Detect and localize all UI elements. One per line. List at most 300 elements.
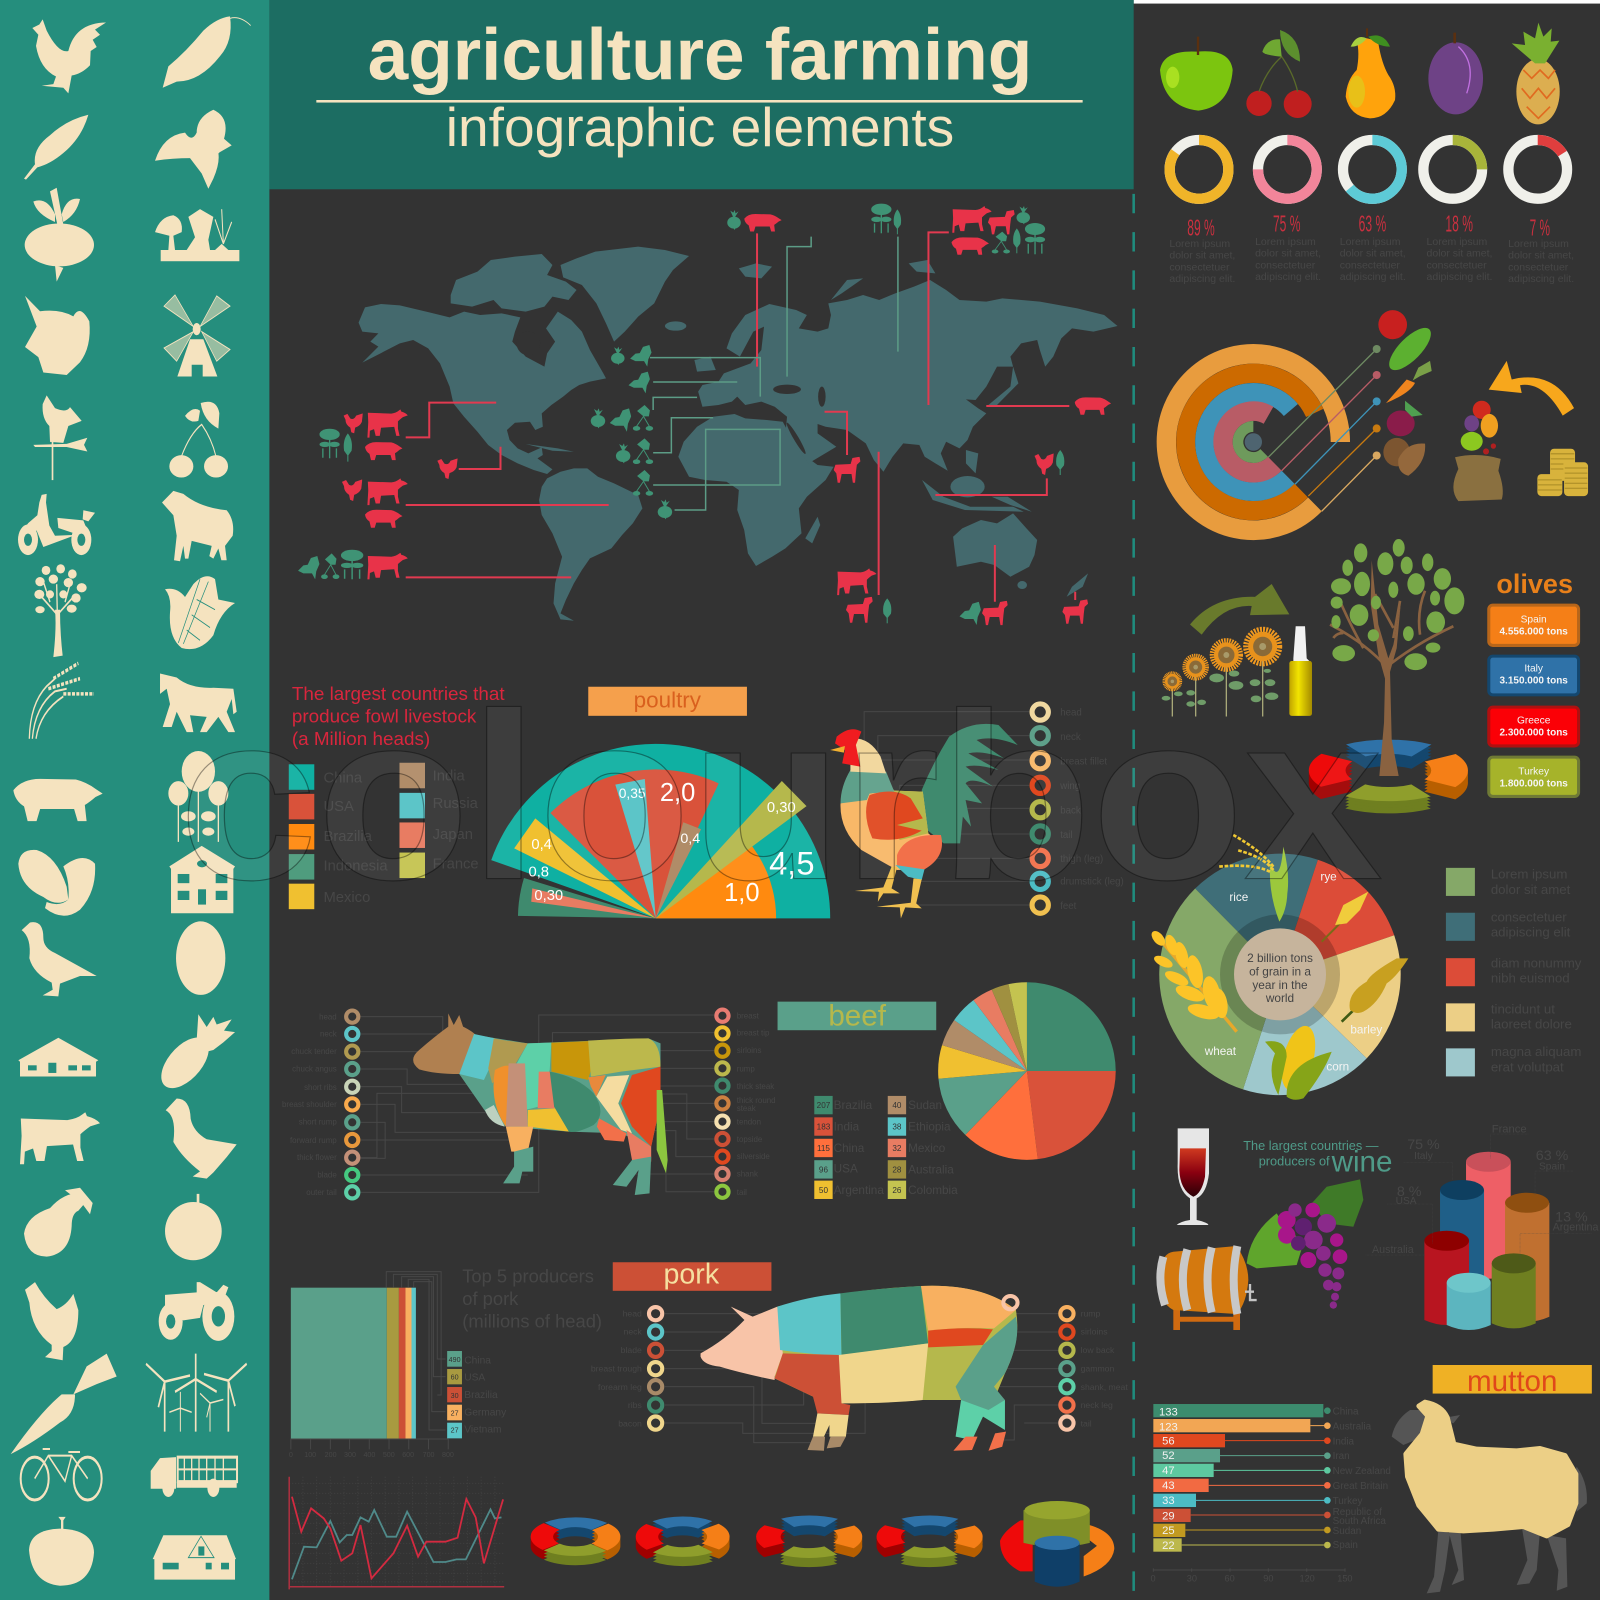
rooster part labels: wing	[1059, 781, 1080, 792]
cow right rings	[716, 1010, 729, 1198]
pork label	[613, 1259, 771, 1291]
beef legend: Brazilia	[834, 1099, 873, 1112]
cow chest	[494, 1066, 511, 1127]
map: continents	[359, 247, 1118, 621]
beef legend: USA	[834, 1162, 858, 1175]
mutton axis labels: 60	[1224, 1574, 1235, 1584]
cow right labels: breast	[737, 1011, 760, 1020]
panel: icon sidebar	[0, 0, 269, 1600]
fruit captions: adipiscing elit.	[1255, 271, 1321, 283]
grain legend: tincidunt ut	[1491, 1001, 1555, 1016]
cow forelegs	[506, 1127, 533, 1152]
olives: Spain	[1489, 605, 1579, 645]
mutton label	[1433, 1365, 1592, 1398]
cow tail	[657, 1090, 668, 1173]
rooster part labels: thigh (leg)	[1060, 854, 1103, 865]
icon: truck	[151, 1457, 237, 1497]
icon: turnip	[25, 188, 94, 282]
olives: Turkey: Turkey	[1518, 766, 1550, 777]
icon: olive tree	[34, 564, 87, 657]
3d ring chart 3	[753, 1514, 865, 1568]
rooster beak	[830, 746, 845, 753]
poultry heading text	[292, 683, 505, 749]
pork stacked bar chart	[291, 1272, 462, 1449]
poultry legend: Mexico	[323, 890, 370, 906]
vegetable chart and market	[1162, 310, 1588, 716]
grain legend: consectetuer	[1491, 909, 1567, 924]
barrel	[1158, 1246, 1257, 1314]
pig hind hooves	[953, 1432, 1006, 1451]
title banner	[269, 0, 1134, 189]
beef legend: 96	[819, 1165, 828, 1174]
mutton country labels	[1333, 1406, 1391, 1551]
pork chart axis labels and legend text: 200	[325, 1451, 337, 1459]
bars	[1153, 1404, 1323, 1552]
rooster part labels: breast fillet	[1060, 756, 1107, 767]
icon: wheat ear	[24, 115, 88, 180]
beef legend: 183	[817, 1123, 831, 1132]
rooster comb	[835, 729, 861, 767]
pig shoulder	[775, 1353, 850, 1415]
mutton country labels: China	[1333, 1406, 1359, 1417]
icon: garden	[155, 209, 239, 261]
rooster part labels	[1059, 707, 1124, 912]
poultry fan chart: 1,0	[724, 879, 760, 907]
cow leader lines	[360, 1015, 714, 1192]
mutton axis labels: 120	[1299, 1574, 1315, 1584]
bar dots	[1324, 1407, 1331, 1548]
coins	[1537, 449, 1588, 496]
fruit percentages: 75 %	[1273, 211, 1301, 237]
mutton bar chart	[1153, 1402, 1587, 1593]
poultry legend: Japan	[433, 827, 473, 843]
mutton country labels: India	[1333, 1436, 1355, 1447]
pig right labels: sirloins	[1081, 1327, 1108, 1337]
cow right labels: rump	[737, 1064, 755, 1073]
wine country labels: USA	[1396, 1196, 1417, 1207]
grain legend	[1446, 867, 1582, 1076]
olives: Turkey: 1.800.000 tons	[1499, 779, 1568, 790]
cow left labels: forward rump	[290, 1136, 337, 1145]
pork chart axis labels and legend text: 500	[383, 1451, 395, 1459]
icon: tractor	[159, 1282, 234, 1341]
mutton country labels: Great Britain	[1333, 1481, 1388, 1492]
title: agriculture farming	[368, 15, 1032, 96]
3d ring chart 2	[632, 1515, 733, 1568]
rooster part labels: neck	[1060, 732, 1081, 743]
cow left labels: thick flower	[297, 1153, 337, 1162]
cow diagram	[360, 1013, 714, 1195]
poultry legend: Russia	[433, 796, 479, 812]
pig ham	[921, 1286, 1016, 1331]
cow belly	[538, 1072, 555, 1108]
pork chart axis labels and legend text: USA	[464, 1373, 485, 1384]
fruit percentages	[1187, 211, 1550, 241]
olives: Italy	[1489, 656, 1579, 695]
fruit percentage rings	[1170, 140, 1567, 199]
beef legend: 207	[817, 1101, 831, 1110]
cow left rings	[346, 1011, 358, 1198]
pig left labels: forearm leg	[598, 1382, 642, 1392]
wine country labels	[1372, 1124, 1598, 1256]
wine country labels: Argentina	[1553, 1222, 1598, 1234]
beef legend: China	[834, 1142, 865, 1155]
beef legend: Ethiopia	[908, 1121, 951, 1134]
pork chart title: Top 5 producers	[462, 1266, 594, 1287]
rooster part labels: feet	[1060, 901, 1077, 912]
grain labels	[1204, 871, 1382, 1073]
icon: pineapple	[156, 1014, 235, 1099]
icon: rooster	[32, 19, 106, 93]
pork chart axis labels and legend text: 800	[442, 1451, 454, 1459]
poultry fan chart: 0,35	[619, 786, 646, 801]
mutton bar values: 133	[1159, 1406, 1178, 1418]
cow right labels: breast tip	[737, 1029, 770, 1038]
fruit captions: dolor sit amet,	[1169, 250, 1235, 262]
olives: Italy: Italy	[1524, 663, 1544, 674]
pig sirloin	[928, 1328, 993, 1347]
pig right labels	[1081, 1308, 1128, 1429]
pig gammon	[956, 1317, 1017, 1413]
olives: Greece: Greece	[1517, 715, 1551, 726]
grain labels: rice	[1229, 891, 1248, 904]
beef label	[778, 1000, 936, 1033]
poultry legend: France	[433, 856, 479, 872]
icon: weather vane	[33, 395, 87, 480]
pork chart axis labels and legend text: 600	[402, 1451, 414, 1459]
poultry legend: USA	[323, 799, 354, 815]
rooster legs	[855, 867, 922, 918]
pig leader lines	[665, 1314, 1059, 1443]
rooster breast	[840, 791, 941, 870]
rooster diagram	[830, 712, 1029, 918]
mutton country labels: Turkey	[1333, 1496, 1363, 1507]
cow head	[413, 1013, 476, 1074]
cow rib	[551, 1041, 599, 1080]
cow right labels: shank	[737, 1170, 758, 1179]
pig right labels: gammon	[1081, 1363, 1114, 1373]
pig hind leg	[956, 1400, 1005, 1440]
icon: cucumber	[163, 16, 251, 88]
pork chart axis labels and legend text: 60	[451, 1374, 459, 1382]
pointer lines	[1268, 349, 1377, 511]
dashed divider	[1132, 194, 1135, 1600]
olives: Spain: 4.556.000 tons	[1499, 627, 1568, 638]
arrow: orange	[1489, 361, 1574, 416]
icon: rice stalk	[29, 663, 94, 739]
barrel legs	[1173, 1310, 1240, 1330]
poultry legend: Brazilia	[323, 829, 373, 845]
mutton bar values: 47	[1162, 1465, 1175, 1477]
map: red leader lines	[406, 232, 1075, 602]
icon: windmill	[164, 295, 230, 377]
fruit captions: dolor sit amet,	[1340, 248, 1406, 260]
pork chart axis labels and legend text: 30	[451, 1392, 459, 1400]
poultry fan chart: 0,30	[534, 888, 563, 904]
sack with fruit	[1453, 401, 1503, 501]
icon: cow	[20, 1112, 100, 1164]
beef legend: 38	[892, 1123, 902, 1132]
poultry fan chart: 0,8	[528, 865, 549, 881]
rooster part rings	[1032, 704, 1048, 913]
icon: tomato	[165, 1194, 222, 1260]
rooster part labels: tail	[1060, 830, 1073, 841]
pork chart axis labels and legend text: China	[464, 1355, 491, 1366]
grain: barley icon	[1342, 958, 1408, 1022]
beef legend: Australia	[908, 1163, 954, 1176]
cylinder chart	[1424, 1152, 1549, 1330]
mutton bar values: 25	[1162, 1525, 1175, 1537]
fruit captions: Lorem ipsum	[1427, 236, 1487, 248]
pig fore hooves	[808, 1437, 846, 1451]
wine country labels: 63 %	[1536, 1148, 1569, 1164]
beef legend: Mexico	[908, 1142, 946, 1155]
rooster part labels: head	[1060, 707, 1082, 718]
grain centre	[1234, 928, 1326, 1020]
beef legend: 40	[892, 1101, 902, 1110]
grain legend: diam nonummy	[1491, 955, 1582, 970]
grain centre text: world	[1265, 991, 1294, 1005]
cow left labels: chuck tender	[291, 1047, 337, 1056]
mutton label: mutton	[1467, 1365, 1557, 1398]
pork chart axis labels and legend text: Germany	[464, 1407, 507, 1418]
icon: wind turbines	[146, 1354, 247, 1432]
poultry heading text: (a Million heads)	[292, 728, 430, 749]
icon: plum	[176, 921, 225, 995]
sheep legs and head	[1392, 1410, 1587, 1593]
wine country labels: Italy	[1414, 1151, 1434, 1162]
wine country labels: Australia	[1372, 1244, 1414, 1256]
poultry heading text: The largest countries that	[292, 683, 505, 704]
pork chart axis labels and legend text: Brazilia	[464, 1390, 498, 1401]
teal series	[292, 1509, 501, 1579]
grain: corn icon	[1265, 1022, 1332, 1100]
cow neck	[459, 1034, 495, 1080]
poultry fan chart: 4,5	[769, 844, 815, 881]
ring: 18 percent	[1423, 140, 1482, 199]
mutton country labels: South Africa	[1333, 1516, 1386, 1527]
bar leader lines	[386, 1272, 446, 1430]
tree trunk	[1371, 560, 1401, 776]
bar axis	[1153, 1568, 1345, 1572]
fruit: apple	[1160, 37, 1233, 111]
ring: 7 percent	[1508, 140, 1567, 199]
poultry heading text: produce fowl livestock	[292, 705, 477, 726]
bar connectors	[1182, 1426, 1327, 1545]
world map	[298, 204, 1118, 625]
wine heading: producers of	[1259, 1153, 1330, 1168]
pork chart axis labels and legend text: 300	[344, 1451, 356, 1459]
sheep fleece	[1406, 1402, 1576, 1536]
cow left labels	[282, 1012, 337, 1197]
leader lines	[861, 712, 1029, 905]
fruit captions: consectetuer	[1427, 259, 1487, 271]
icon: cottage	[153, 1535, 236, 1580]
pig left labels: ribs	[628, 1400, 643, 1410]
cow left labels: chuck angus	[292, 1064, 337, 1073]
sunflower leaves	[1162, 669, 1278, 707]
pig right rings	[1060, 1307, 1074, 1430]
mutton axis labels	[1151, 1574, 1353, 1584]
bar axis	[291, 1439, 448, 1449]
fruit captions: Lorem ipsum	[1169, 238, 1230, 250]
rooster part labels: drumstick (leg)	[1060, 877, 1124, 888]
tree leaves	[1331, 539, 1464, 670]
white strip top right	[1134, 0, 1600, 4]
mutton bar values: 33	[1162, 1495, 1175, 1507]
cow udder	[597, 1118, 627, 1142]
fruit percentages: 7 %	[1530, 215, 1550, 241]
fruit row	[1160, 23, 1560, 124]
olives: Italy: 3.150.000 tons	[1499, 676, 1568, 687]
bar legend	[447, 1351, 462, 1438]
icon: sunflowers	[168, 751, 228, 842]
icon: bicycle	[21, 1449, 102, 1500]
wine country labels: 75 %	[1407, 1137, 1440, 1153]
cow left labels: neck	[320, 1030, 337, 1039]
grain centre text	[1247, 951, 1313, 1005]
cow left labels: short ribs	[304, 1083, 337, 1092]
cow right labels: tail	[737, 1188, 747, 1197]
beef legend: 115	[817, 1144, 830, 1153]
grain: wheat icon	[1149, 928, 1237, 1032]
cow right labels: tendon	[737, 1117, 761, 1126]
pork chart title: of pork	[462, 1288, 519, 1309]
rooster drumstick	[895, 865, 924, 880]
grain legend: magna aliquam	[1491, 1044, 1581, 1059]
pig neck	[777, 1293, 842, 1355]
cow left labels: outer tail	[306, 1188, 337, 1197]
rooster wing	[866, 792, 923, 840]
icon: carrot	[11, 1354, 117, 1454]
wine country labels: 8 %	[1397, 1184, 1422, 1200]
olives: Spain: Spain	[1521, 614, 1547, 625]
grain legend: nibh euismod	[1491, 971, 1570, 986]
grain labels: corn	[1326, 1060, 1349, 1073]
beef label: beef	[828, 1000, 887, 1033]
fruit captions: adipiscing elit.	[1508, 273, 1574, 285]
pork chart title	[462, 1266, 602, 1332]
olives: Greece: 2.300.000 tons	[1499, 728, 1568, 739]
sunflower blossoms	[1164, 629, 1280, 690]
rooster neck	[841, 770, 894, 803]
cow right labels: topside	[737, 1135, 763, 1144]
mutton bar values	[1159, 1406, 1178, 1552]
fruit captions: adipiscing elit.	[1427, 271, 1492, 283]
cow body base	[459, 1035, 661, 1147]
beef legend: 50	[819, 1186, 828, 1195]
arrow: olive	[1190, 584, 1289, 635]
map: green crop icons	[298, 204, 1064, 625]
pork chart axis labels and legend text: 700	[423, 1451, 435, 1459]
vegetable: carrot	[1386, 361, 1432, 403]
mutton axis labels: 90	[1263, 1574, 1273, 1584]
cow left labels: blade	[317, 1171, 337, 1180]
pork chart title: (millions of head)	[462, 1311, 602, 1332]
pig left labels: neck	[624, 1327, 642, 1337]
subtitle: infographic elements	[446, 96, 954, 158]
cow right labels: sirloins	[737, 1046, 761, 1055]
oil bottle	[1289, 626, 1312, 716]
map: green leader lines	[650, 237, 898, 510]
pork chart axis labels and legend text	[289, 1355, 507, 1459]
rooster back	[878, 777, 928, 840]
icon: goose	[22, 922, 97, 996]
pig belly	[839, 1343, 928, 1403]
grain legend: erat volutpat	[1491, 1059, 1564, 1074]
pig diagram	[665, 1286, 1059, 1451]
grain centre text: year in the	[1252, 978, 1308, 992]
wine country labels: 13 %	[1555, 1209, 1588, 1225]
mutton country labels: Republic of	[1333, 1507, 1382, 1518]
wine heading: The largest countries —	[1243, 1138, 1379, 1153]
grain centre text: of grain in a	[1249, 965, 1311, 979]
grain segments	[1159, 854, 1401, 1095]
3d ring chart 5 with pillars	[1000, 1501, 1114, 1587]
bar segments	[291, 1288, 416, 1439]
icon: horse	[160, 673, 237, 732]
cow right labels	[737, 1011, 776, 1197]
cow sirloin tip	[588, 1075, 606, 1097]
cow right labels: thick round	[737, 1096, 776, 1105]
olive tree branches	[1330, 591, 1453, 667]
beef legend: Argentina	[834, 1184, 884, 1197]
mutton country labels: Australia	[1333, 1422, 1372, 1433]
pig left labels: bacon	[618, 1419, 642, 1429]
rooster head	[850, 738, 886, 773]
fruit: plum	[1428, 33, 1483, 114]
cow chuck	[488, 1038, 528, 1083]
vegetable: cucumber	[1383, 322, 1437, 377]
beef legend: 28	[892, 1165, 902, 1174]
fruit percentages: 89 %	[1187, 215, 1215, 241]
fruit captions: consectetuer	[1169, 261, 1230, 273]
line chart axes	[289, 1477, 504, 1589]
map: red livestock icons	[342, 206, 1111, 625]
pig left labels: head	[623, 1308, 642, 1318]
mutton country labels: New Zealand	[1333, 1466, 1391, 1477]
pig left rings	[649, 1307, 662, 1430]
pig tail	[1003, 1296, 1018, 1309]
poultry fan chart: 2,0	[660, 779, 695, 807]
mutton axis labels: 30	[1187, 1574, 1197, 1584]
wine country labels: Spain	[1539, 1161, 1565, 1172]
pig right labels: neck leg	[1081, 1400, 1113, 1410]
poultry label	[588, 687, 747, 716]
mutton bar values: 52	[1162, 1450, 1175, 1462]
pig loin	[840, 1286, 928, 1355]
fruit captions: dolor sit amet,	[1255, 248, 1321, 260]
concentric arc chart	[1166, 354, 1340, 530]
fruit captions: dolor sit amet,	[1427, 248, 1492, 260]
mutton bar values: 29	[1162, 1510, 1175, 1522]
3d ring chart 1	[528, 1516, 623, 1566]
icon: apple	[29, 1517, 94, 1586]
vegetable: beet	[1387, 401, 1423, 436]
line chart grid	[289, 1477, 504, 1587]
fruit captions: Lorem ipsum	[1340, 236, 1401, 248]
pig right labels: tail	[1081, 1419, 1092, 1429]
icon: sheep	[162, 491, 233, 561]
mutton bar values: 22	[1162, 1540, 1175, 1552]
cow left labels: head	[319, 1012, 337, 1021]
mutton country labels: Sudan	[1333, 1526, 1361, 1537]
pig left labels	[591, 1308, 643, 1429]
fruit percentages: 63 %	[1359, 211, 1386, 237]
cow rump	[621, 1067, 661, 1147]
pork chart axis labels and legend text: 27	[451, 1409, 459, 1417]
fruit captions: adipiscing elit.	[1340, 271, 1406, 283]
